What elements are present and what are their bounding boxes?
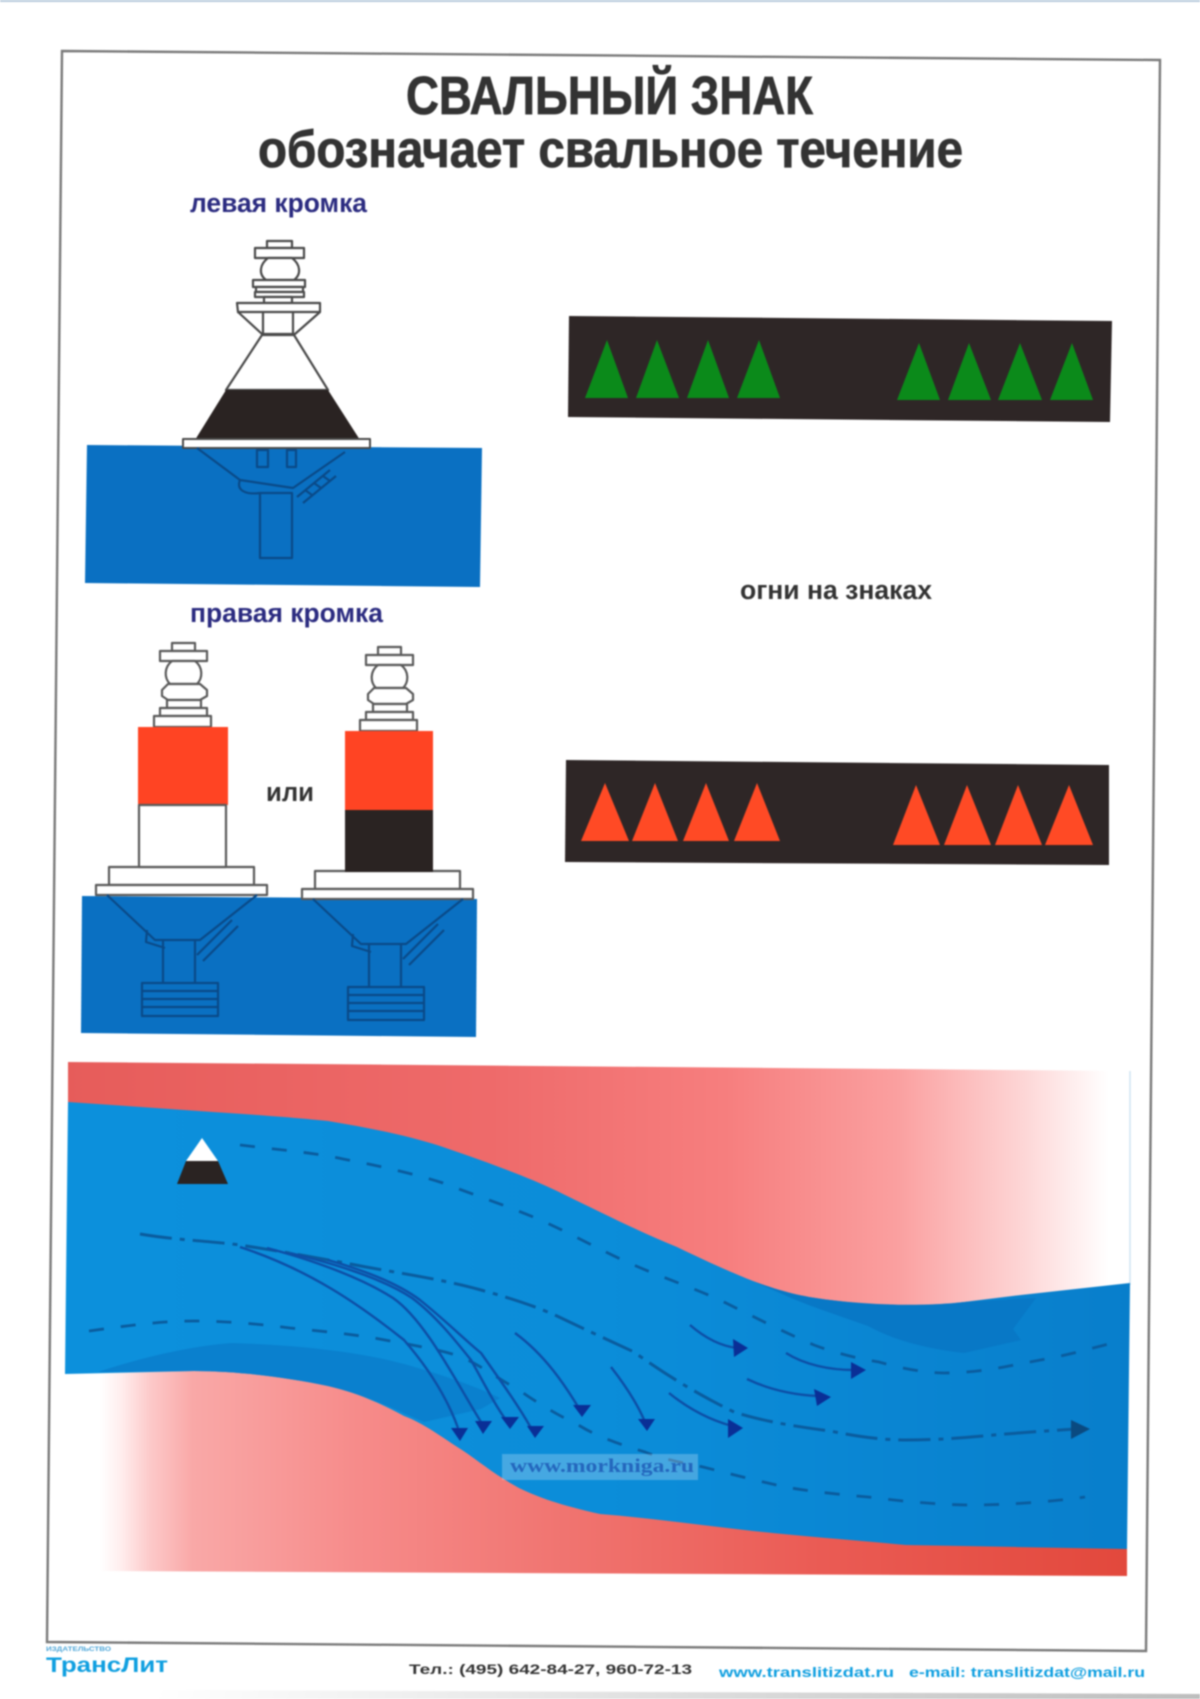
footer: phone: Тел.: (495) 642-84-27, 960-72-13 — [409, 1661, 692, 1677]
heading: left edge: левая кромка — [190, 188, 368, 218]
band: red over white — [138, 727, 228, 867]
footer: website: www.translitizdat.ru — [718, 1664, 894, 1680]
band: red over black — [345, 731, 433, 872]
green triangles left — [585, 340, 780, 398]
footer: email: e-mail: translitizdat@mail.ru — [909, 1664, 1145, 1680]
water block — [85, 445, 482, 587]
red triangles left — [581, 783, 780, 841]
title: СВАЛЬНЫЙ ЗНАК — [406, 65, 814, 126]
green triangles right — [897, 343, 1093, 400]
panel: green lights — [568, 316, 1112, 422]
deep water patch left — [98, 1343, 500, 1422]
current arrowheads — [451, 1339, 866, 1441]
red triangles right — [893, 785, 1093, 845]
bottom river bank — [68, 1360, 1127, 1576]
edge line — [1129, 1071, 1131, 1285]
panel: red lights — [565, 760, 1109, 865]
main route arrowhead — [1071, 1420, 1090, 1439]
top dashed route — [240, 1145, 1120, 1373]
publisher logo: ТрансЛит — [46, 1654, 168, 1677]
current arrows — [240, 1247, 854, 1428]
watermark: www.morkniga.ru — [510, 1456, 695, 1477]
sign marker on river — [177, 1138, 228, 1184]
title — [258, 65, 963, 179]
river diagram — [65, 1062, 1130, 1576]
caption: lights on signs: огни на знаках — [740, 575, 932, 605]
middle dash-dot route — [140, 1234, 1075, 1440]
buoy: red and black — [302, 647, 473, 1020]
panel: left edge buoy on water — [85, 241, 482, 587]
panel: right edge buoys on water — [81, 643, 477, 1037]
publisher logo — [46, 1647, 168, 1677]
deep water patch right — [753, 1281, 1036, 1353]
cone white part — [226, 335, 328, 390]
publisher logo: ИЗДАТЕЛЬСТВО — [46, 1647, 111, 1653]
base plate — [183, 439, 370, 448]
title: обозначает свальное течение — [258, 121, 963, 179]
heading: right edge: правая кромка — [190, 598, 384, 628]
underwater hull — [197, 448, 345, 558]
lower dashed route — [89, 1321, 1085, 1505]
cone black band — [195, 390, 360, 440]
top river bank — [68, 1062, 1130, 1310]
buoy topmark — [237, 241, 320, 334]
watermark — [502, 1454, 698, 1480]
water block — [81, 896, 477, 1037]
buoy: red and white — [96, 643, 267, 1016]
label: or: или — [266, 777, 314, 807]
river water — [65, 1102, 1130, 1549]
